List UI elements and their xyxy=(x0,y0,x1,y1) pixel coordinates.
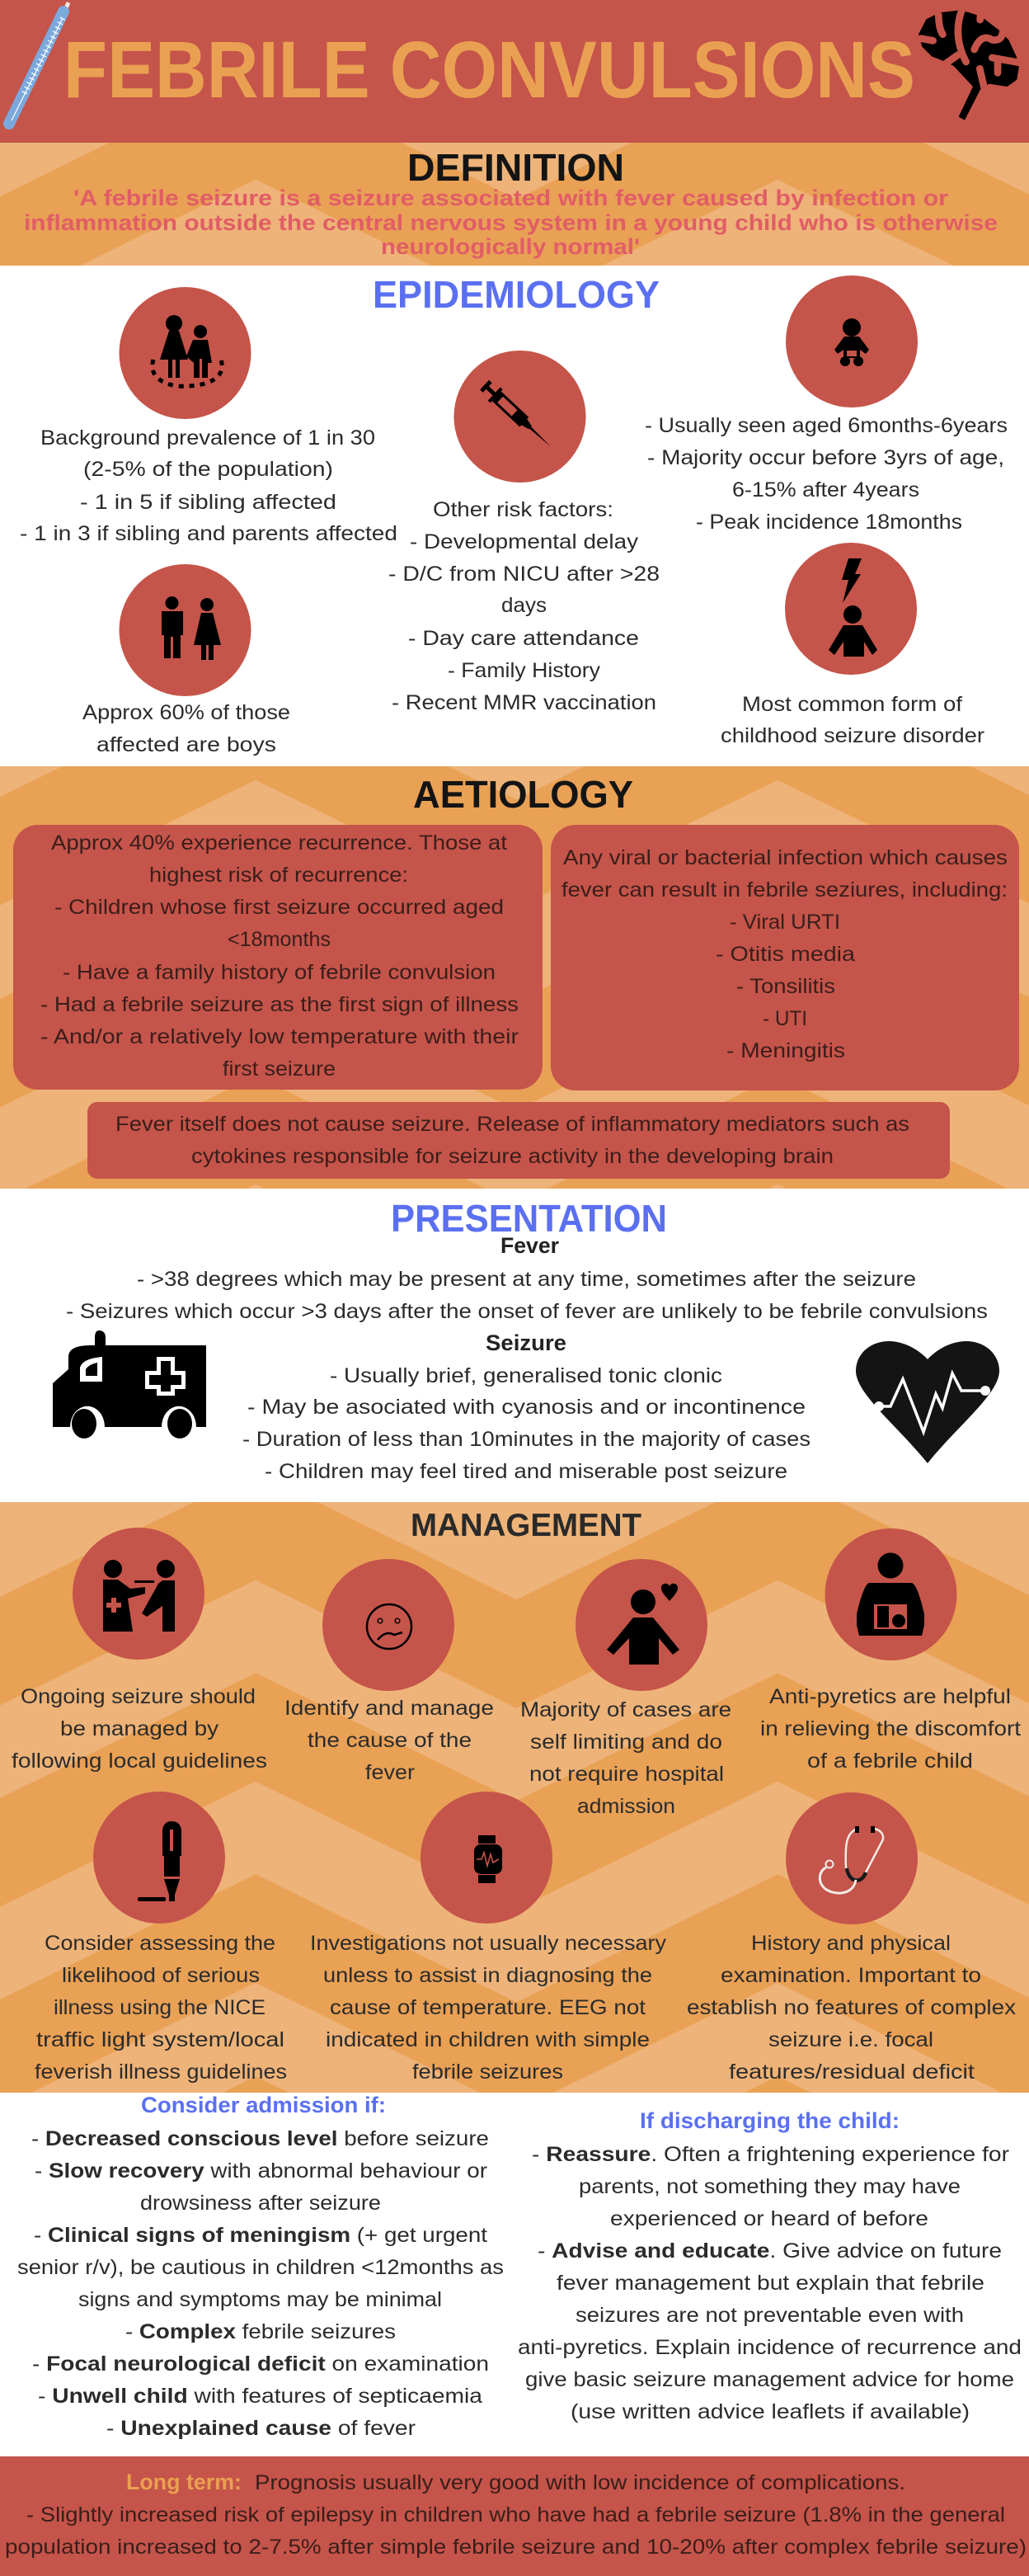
text: investigations: cause of temperature. EEG not xyxy=(330,1996,646,2019)
panel: admission and discharge xyxy=(0,2093,1029,2456)
text: assess illness xyxy=(35,1932,287,2084)
text: assess illness: illness using the NICE xyxy=(54,1996,265,2019)
icon: boy and girl circle xyxy=(119,564,251,696)
text: anti-pyretics xyxy=(760,1685,1021,1773)
card: mediators xyxy=(87,1102,950,1179)
icon: heart with ECG xyxy=(856,1341,999,1463)
card: infections: fever can result in febrile seziures, including: xyxy=(561,878,1008,902)
text: other risk factors: Other risk factors: xyxy=(433,498,613,521)
text: investigations xyxy=(310,1932,667,2084)
text: age xyxy=(645,414,1008,534)
text: prognosis: Prognosis usually very good with low incidence of complications. xyxy=(255,2471,905,2494)
text: boys xyxy=(82,701,290,756)
text: consider admission: - Unexplained cause of fever xyxy=(106,2417,416,2440)
text: identify cause: the cause of the xyxy=(308,1729,472,1752)
icon: person with medicine xyxy=(825,1528,956,1660)
text: ongoing seizure: be managed by xyxy=(60,1717,219,1740)
text: discharge advice: If discharging the child: xyxy=(640,2108,900,2133)
text: consider admission: - Focal neurological deficit on examination xyxy=(32,2352,489,2376)
icon: sick face xyxy=(322,1559,454,1691)
text: fever: - >38 degrees which may be present at any time, sometimes after the seizure xyxy=(137,1268,916,1291)
heading: epidemiology: EPIDEMIOLOGY xyxy=(373,273,660,316)
text: boys: Approx 60% of those xyxy=(82,701,290,724)
text: consider admission: drowsiness after seizure xyxy=(140,2192,381,2215)
card: recurrence: Approx 40% experience recurrence. Those at xyxy=(51,831,507,855)
title: FEBRILE CONVULSIONS xyxy=(63,25,915,115)
text: age: - Majority occur before 3yrs of age, xyxy=(647,446,1004,469)
text: other risk factors: - Developmental delay xyxy=(410,530,639,553)
text: seizure disorder xyxy=(721,693,984,747)
label: long term: Long term: xyxy=(126,2470,242,2494)
text: discharge advice: (use written advice leaflets if available) xyxy=(571,2400,970,2423)
card: infections: - Tonsilitis xyxy=(736,975,835,998)
panel: long term xyxy=(0,2456,1029,2576)
text: prevalence: - 1 in 5 if sibling affected xyxy=(80,491,336,514)
text: seizure: - Usually brief, generalised tonic clonic xyxy=(330,1364,722,1387)
card: recurrence: first seizure xyxy=(223,1057,336,1081)
card: infections xyxy=(551,825,1019,1090)
text: self limiting: admission xyxy=(577,1795,675,1818)
text: discharge advice: give basic seizure management advice for home xyxy=(525,2368,1014,2391)
text: consider admission xyxy=(17,2093,504,2440)
card: infections: - UTI xyxy=(763,1007,807,1030)
text: consider admission: Consider admission if: xyxy=(141,2093,386,2117)
card: recurrence: - Children whose first seizure occurred aged xyxy=(54,896,504,919)
text: discharge advice: anti-pyretics. Explain incidence of recurrence and xyxy=(518,2336,1022,2359)
card: infections: - Meningitis xyxy=(726,1039,845,1062)
panel: aetiology xyxy=(0,766,1029,1189)
text: assess illness: feverish illness guidelines xyxy=(35,2060,287,2084)
text: seizure: - Children may feel tired and miserable post seizure xyxy=(265,1460,787,1483)
text: consider admission: senior r/v), be cautious in children <12months as xyxy=(17,2256,504,2279)
text: definition quote: 'A febrile seizure is a seizure associated with fever caused by infection or xyxy=(73,186,949,210)
text: self limiting: not require hospital xyxy=(529,1763,724,1786)
text: investigations: febrile seizures xyxy=(412,2060,563,2084)
icon: thermometer xyxy=(9,2,68,124)
text: investigations: indicated in children with simple xyxy=(326,2028,650,2051)
text: definition quote: neurologically normal' xyxy=(381,234,640,259)
text: definition quote xyxy=(24,186,998,259)
icon: child with heart xyxy=(576,1559,707,1691)
card: mediators: cytokines responsible for seizure activity in the developing brain xyxy=(191,1145,834,1168)
card: infections: - Viral URTI xyxy=(730,911,840,934)
text: seizure: - May be asociated with cyanosis and or incontinence xyxy=(247,1396,806,1419)
card: recurrence: <18months xyxy=(228,928,331,951)
text: seizure: Seizure xyxy=(486,1330,566,1355)
text: investigations: Investigations not usually necessary xyxy=(310,1932,667,1955)
text: anti-pyretics: of a febrile child xyxy=(807,1750,973,1773)
text: boys: affected are boys xyxy=(96,733,276,756)
panel: management xyxy=(0,1502,1029,2093)
heading: definition: DEFINITION xyxy=(407,146,624,189)
text: history and examination: examination. Important to xyxy=(721,1964,981,1987)
card: infections: - Otitis media xyxy=(716,943,855,966)
text: discharge advice: fever management but explain that febrile xyxy=(557,2272,984,2295)
text: seizure xyxy=(242,1330,811,1483)
text: prevalence: Background prevalence of 1 in 30 xyxy=(40,426,375,450)
icon: stethoscope xyxy=(786,1792,918,1924)
text: history and examination: features/residual deficit xyxy=(729,2060,975,2084)
text: identify cause: fever xyxy=(365,1761,415,1784)
text: seizure disorder: childhood seizure disorder xyxy=(721,724,984,747)
text: seizure: - Duration of less than 10minutes in the majority of cases xyxy=(242,1428,811,1451)
text: other risk factors: days xyxy=(501,594,547,617)
text: ongoing seizure xyxy=(12,1685,267,1773)
icon: brain xyxy=(919,10,1020,120)
text: consider admission: signs and symptoms may be minimal xyxy=(78,2288,442,2311)
text: discharge advice: - Advise and educate . Give advice on future xyxy=(538,2239,1002,2263)
heading: management: MANAGEMENT xyxy=(411,1508,641,1543)
text: prevalence: (2-5% of the population) xyxy=(83,458,333,481)
text: fever: Fever xyxy=(500,1233,559,1258)
card: recurrence: - Have a family history of febrile convulsion xyxy=(63,961,496,984)
text: assess illness: Consider assessing the xyxy=(45,1932,275,1955)
icon: syringe circle xyxy=(453,351,585,483)
text: seizure disorder: Most common form of xyxy=(742,693,962,716)
text: prevalence: - 1 in 3 if sibling and parents affected xyxy=(20,522,397,545)
heading: aetiology: AETIOLOGY xyxy=(413,773,633,816)
card: recurrence: highest risk of recurrence: xyxy=(149,864,408,887)
panel: definition xyxy=(0,143,1029,266)
text: anti-pyretics: Anti-pyretics are helpful xyxy=(769,1685,1011,1708)
text: definition quote: inflammation outside the central nervous system in a young child who is otherwise xyxy=(24,210,998,235)
text: history and examination: seizure i.e. focal xyxy=(768,2028,933,2051)
text: age: - Peak incidence 18months xyxy=(696,511,962,534)
text: ongoing seizure: Ongoing seizure should xyxy=(21,1685,256,1708)
text: discharge advice: experienced or heard of before xyxy=(610,2207,928,2230)
card: recurrence: - And/or a relatively low temperature with their xyxy=(40,1025,519,1048)
panel: presentation xyxy=(0,1189,1029,1502)
text: other risk factors: - Day care attendance xyxy=(408,627,639,650)
text: assess illness: traffic light system/local xyxy=(36,2028,284,2051)
text: self limiting xyxy=(520,1698,731,1818)
text: consider admission: - Unwell child with features of septicaemia xyxy=(38,2385,482,2408)
text: self limiting: self limiting and do xyxy=(530,1731,722,1754)
card: mediators: Fever itself does not cause seizure. Release of inflammatory mediators such as xyxy=(115,1113,909,1136)
text: investigations: unless to assist in diagnosing the xyxy=(323,1964,652,1987)
text: assess illness: likelihood of serious xyxy=(62,1964,260,1987)
card: recurrence xyxy=(13,825,543,1090)
icon: smart watch xyxy=(421,1792,552,1924)
text: epilepsy risk: - Slightly increased risk of epilepsy in children who have had a febrile seizure (1.8% in the general xyxy=(26,2503,1005,2527)
text: prevalence xyxy=(20,426,397,545)
text: history and examination: History and physical xyxy=(751,1932,951,1955)
icon: baby circle xyxy=(786,275,918,407)
card: recurrence: - Had a febrile seizure as the first sign of illness xyxy=(40,993,519,1016)
text: fever: - Seizures which occur >3 days after the onset of fever are unlikely to be febrile convulsions xyxy=(66,1300,988,1323)
text: age: 6-15% after 4years xyxy=(732,478,919,502)
text: discharge advice: - Reassure . Often a frightening experience for xyxy=(532,2143,1009,2166)
text: consider admission: - Slow recovery with abnormal behaviour or xyxy=(35,2159,487,2183)
text: age: - Usually seen aged 6months-6years xyxy=(645,414,1008,437)
text: identify cause xyxy=(284,1697,494,1784)
text: history and examination: establish no features of complex xyxy=(687,1996,1017,2019)
text: other risk factors xyxy=(388,498,660,714)
text: consider admission: - Complex febrile seizures xyxy=(125,2320,396,2343)
text: other risk factors: - Recent MMR vaccination xyxy=(392,691,656,714)
icon: pen xyxy=(93,1792,225,1924)
text: identify cause: Identify and manage xyxy=(284,1697,494,1720)
text: discharge advice: seizures are not preventable even with xyxy=(576,2304,964,2327)
text: other risk factors: - D/C from NICU after >28 xyxy=(388,563,660,586)
text: other risk factors: - Family History xyxy=(448,659,601,682)
panel: header banner xyxy=(0,0,1029,143)
text: epilepsy risk: population increased to 2-7.5% after simple febrile seizure and 10-20% after complex febrile seizure) xyxy=(5,2536,1027,2559)
text: ongoing seizure: following local guidelines xyxy=(12,1750,267,1773)
heading: presentation: PRESENTATION xyxy=(391,1197,667,1240)
text: fever xyxy=(66,1233,988,1323)
text: consider admission: - Decreased conscious level before seizure xyxy=(31,2127,489,2150)
icon: family circle xyxy=(119,287,251,419)
text: discharge advice: parents, not something they may have xyxy=(579,2175,961,2198)
text: consider admission: - Clinical signs of meningism (+ get urgent xyxy=(34,2224,487,2247)
text: self limiting: Majority of cases are xyxy=(520,1698,731,1721)
text: anti-pyretics: in relieving the discomfort xyxy=(760,1717,1021,1740)
icon: lightning and child circle xyxy=(785,543,917,675)
text: discharge advice xyxy=(518,2108,1022,2423)
text: epilepsy risk xyxy=(5,2503,1027,2559)
icon: ambulance xyxy=(53,1330,206,1439)
text: history and examination xyxy=(687,1932,1017,2084)
panel: epidemiology xyxy=(0,266,1029,766)
card: infections: Any viral or bacterial infection which causes xyxy=(563,846,1008,869)
icon: clinician treating patient xyxy=(73,1528,204,1660)
